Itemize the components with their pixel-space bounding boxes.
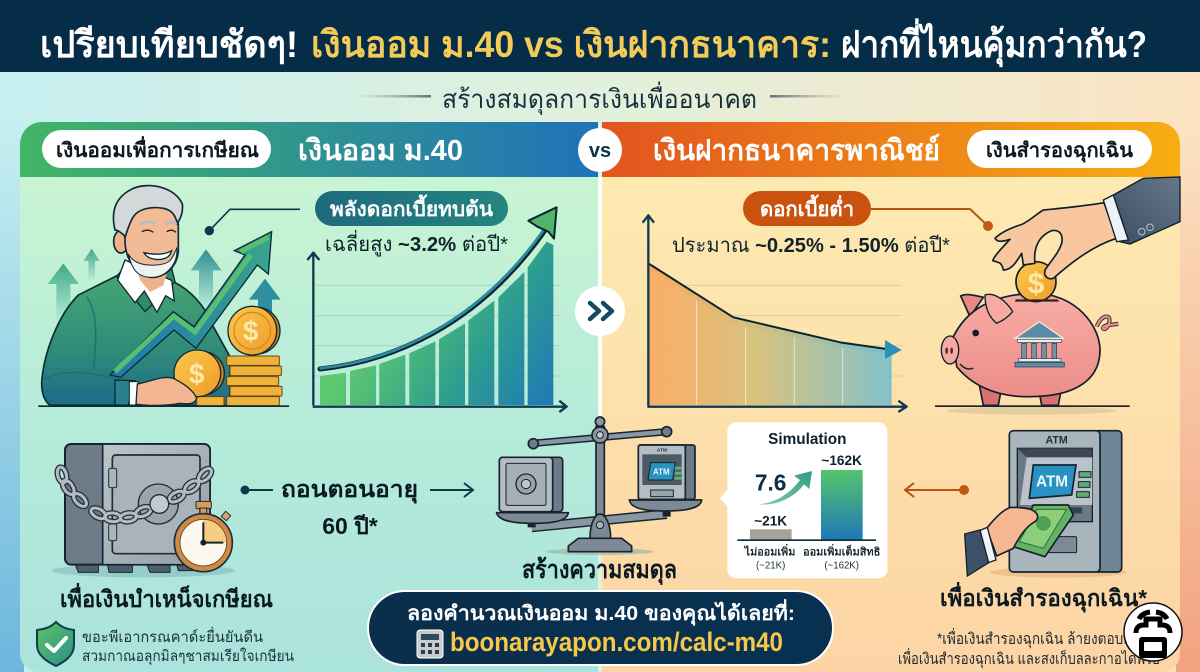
simulation growth arrow bbox=[759, 471, 812, 504]
simulation values: ~21K bbox=[754, 513, 787, 528]
panel header: bank bbox=[602, 122, 1180, 177]
callout: compound interest: เฉลี่ยสูง ~3.2% ต่อปี* bbox=[325, 230, 508, 257]
subtitle: สร้างสมดุลการเงินเพื่ออนาคต bbox=[442, 81, 757, 115]
simulation bar labels: (~162K) bbox=[824, 561, 859, 572]
simulation heading: Simulation bbox=[768, 431, 847, 448]
callout: compound interest: พลังดอกเบี้ยทบต้น bbox=[330, 194, 493, 221]
title banner bbox=[0, 0, 1200, 72]
arrow: ATM to balance bbox=[905, 483, 969, 497]
panel: right bank body bbox=[602, 177, 1180, 672]
illustration: balance scale with safe and ATM: ATM bbox=[657, 448, 667, 454]
illustration: chained safe with stopwatch bbox=[52, 444, 235, 577]
illustration: balance scale with safe and ATM: ATM bbox=[653, 468, 670, 477]
illustration: piggy bank and hand: $ bbox=[1028, 267, 1045, 300]
callout: low interest bbox=[672, 191, 993, 257]
panel: left savings body bbox=[20, 177, 598, 672]
simulation bar labels: (~21K) bbox=[756, 561, 785, 572]
vs badge bbox=[578, 128, 622, 172]
title banner: เปรียบเทียบชัดๆ! bbox=[40, 24, 298, 65]
chart: declining bank interest bbox=[643, 215, 907, 412]
icon: shield check bbox=[37, 622, 74, 666]
title banner: ฝากที่ไหนคุ้มกว่ากัน? bbox=[841, 18, 1147, 68]
simulation values: ~162K bbox=[821, 453, 862, 468]
vs badge: vs bbox=[589, 140, 611, 162]
chart: compound interest bars bbox=[307, 207, 567, 412]
withdrawal age label with arrows bbox=[240, 476, 473, 539]
illustration: ATM with hand and cash: ATM bbox=[1036, 474, 1068, 491]
panel header: savings bbox=[20, 122, 598, 177]
note: pension conditions: ขอะพีเอากรณคาด์ะยื่นยันดีน bbox=[82, 626, 263, 646]
simulation bar labels bbox=[744, 544, 880, 572]
panel header: savings: เงินออม ม.40 bbox=[298, 135, 463, 167]
simulation bar labels: ไม่ออมเพิ่ม bbox=[744, 544, 795, 559]
call to action: calculator link: boonarayapon.com/calc-m40 bbox=[450, 627, 783, 657]
simulation values: 7.6 bbox=[755, 469, 786, 495]
panel header: savings: เงินออมเพื่อการเกษียณ bbox=[56, 135, 259, 162]
note: pension conditions bbox=[82, 626, 294, 666]
illustration: ATM with hand and cash bbox=[965, 431, 1127, 578]
callout: compound interest bbox=[315, 191, 508, 257]
label: emergency funds: เพื่อเงินสำรองฉุกเฉิน* bbox=[940, 581, 1147, 613]
panel header: bank: เงินสำรองฉุกเฉิน bbox=[986, 140, 1133, 163]
simulation values bbox=[754, 453, 862, 528]
note: pension conditions: สวมกาณอลุกมิลๆชาสมเรียใจเกษียน bbox=[82, 647, 294, 666]
panel header: bank: เงินฝากธนาคารพาณิชย์ bbox=[653, 133, 940, 167]
illustration: smiling retiree with coins bbox=[38, 186, 300, 407]
label: create balance: สร้างความสมดุล bbox=[522, 556, 677, 586]
illustration: smiling retiree with coins: $ bbox=[189, 358, 205, 389]
withdrawal age label with arrows: ถอนตอนอายุ bbox=[281, 476, 418, 504]
simulation bars bbox=[737, 470, 876, 541]
call to action: calculator link: ลองคำนวณเงินออม ม.40 ของคุณได้เลยที่: bbox=[407, 598, 795, 626]
withdrawal age label with arrows: 60 ปี* bbox=[322, 513, 378, 539]
illustration: balance scale with safe and ATM bbox=[497, 417, 702, 555]
illustration: piggy bank and hand bbox=[935, 177, 1180, 415]
note: emergency funds bbox=[898, 628, 1160, 669]
label: pension: เพื่อเงินบำเหน็จเกษียณ bbox=[60, 582, 273, 612]
next chevrons badge bbox=[575, 286, 625, 336]
icon: calculator bbox=[417, 630, 443, 658]
watermark logo bbox=[1124, 603, 1182, 661]
callout: low interest: ดอกเบี้ยต่ำ bbox=[760, 194, 854, 221]
simulation bar labels: ออมเพิ่มเต็มสิทธิ bbox=[803, 544, 880, 559]
illustration: smiling retiree with coins: $ bbox=[243, 316, 259, 347]
simulation card bbox=[720, 422, 887, 578]
call to action: calculator link bbox=[368, 591, 833, 665]
illustration: ATM with hand and cash: ATM bbox=[1046, 434, 1068, 446]
center divider bbox=[598, 177, 602, 417]
title banner: เงินออม ม.40 vs เงินฝากธนาคาร: bbox=[311, 24, 831, 65]
callout: low interest: ประมาณ ~0.25% - 1.50% ต่อปี* bbox=[672, 234, 950, 257]
note: emergency funds: *เพื่อเงินสำรองฉุกเฉิน ล้ายงตอบแ bbox=[937, 628, 1132, 649]
